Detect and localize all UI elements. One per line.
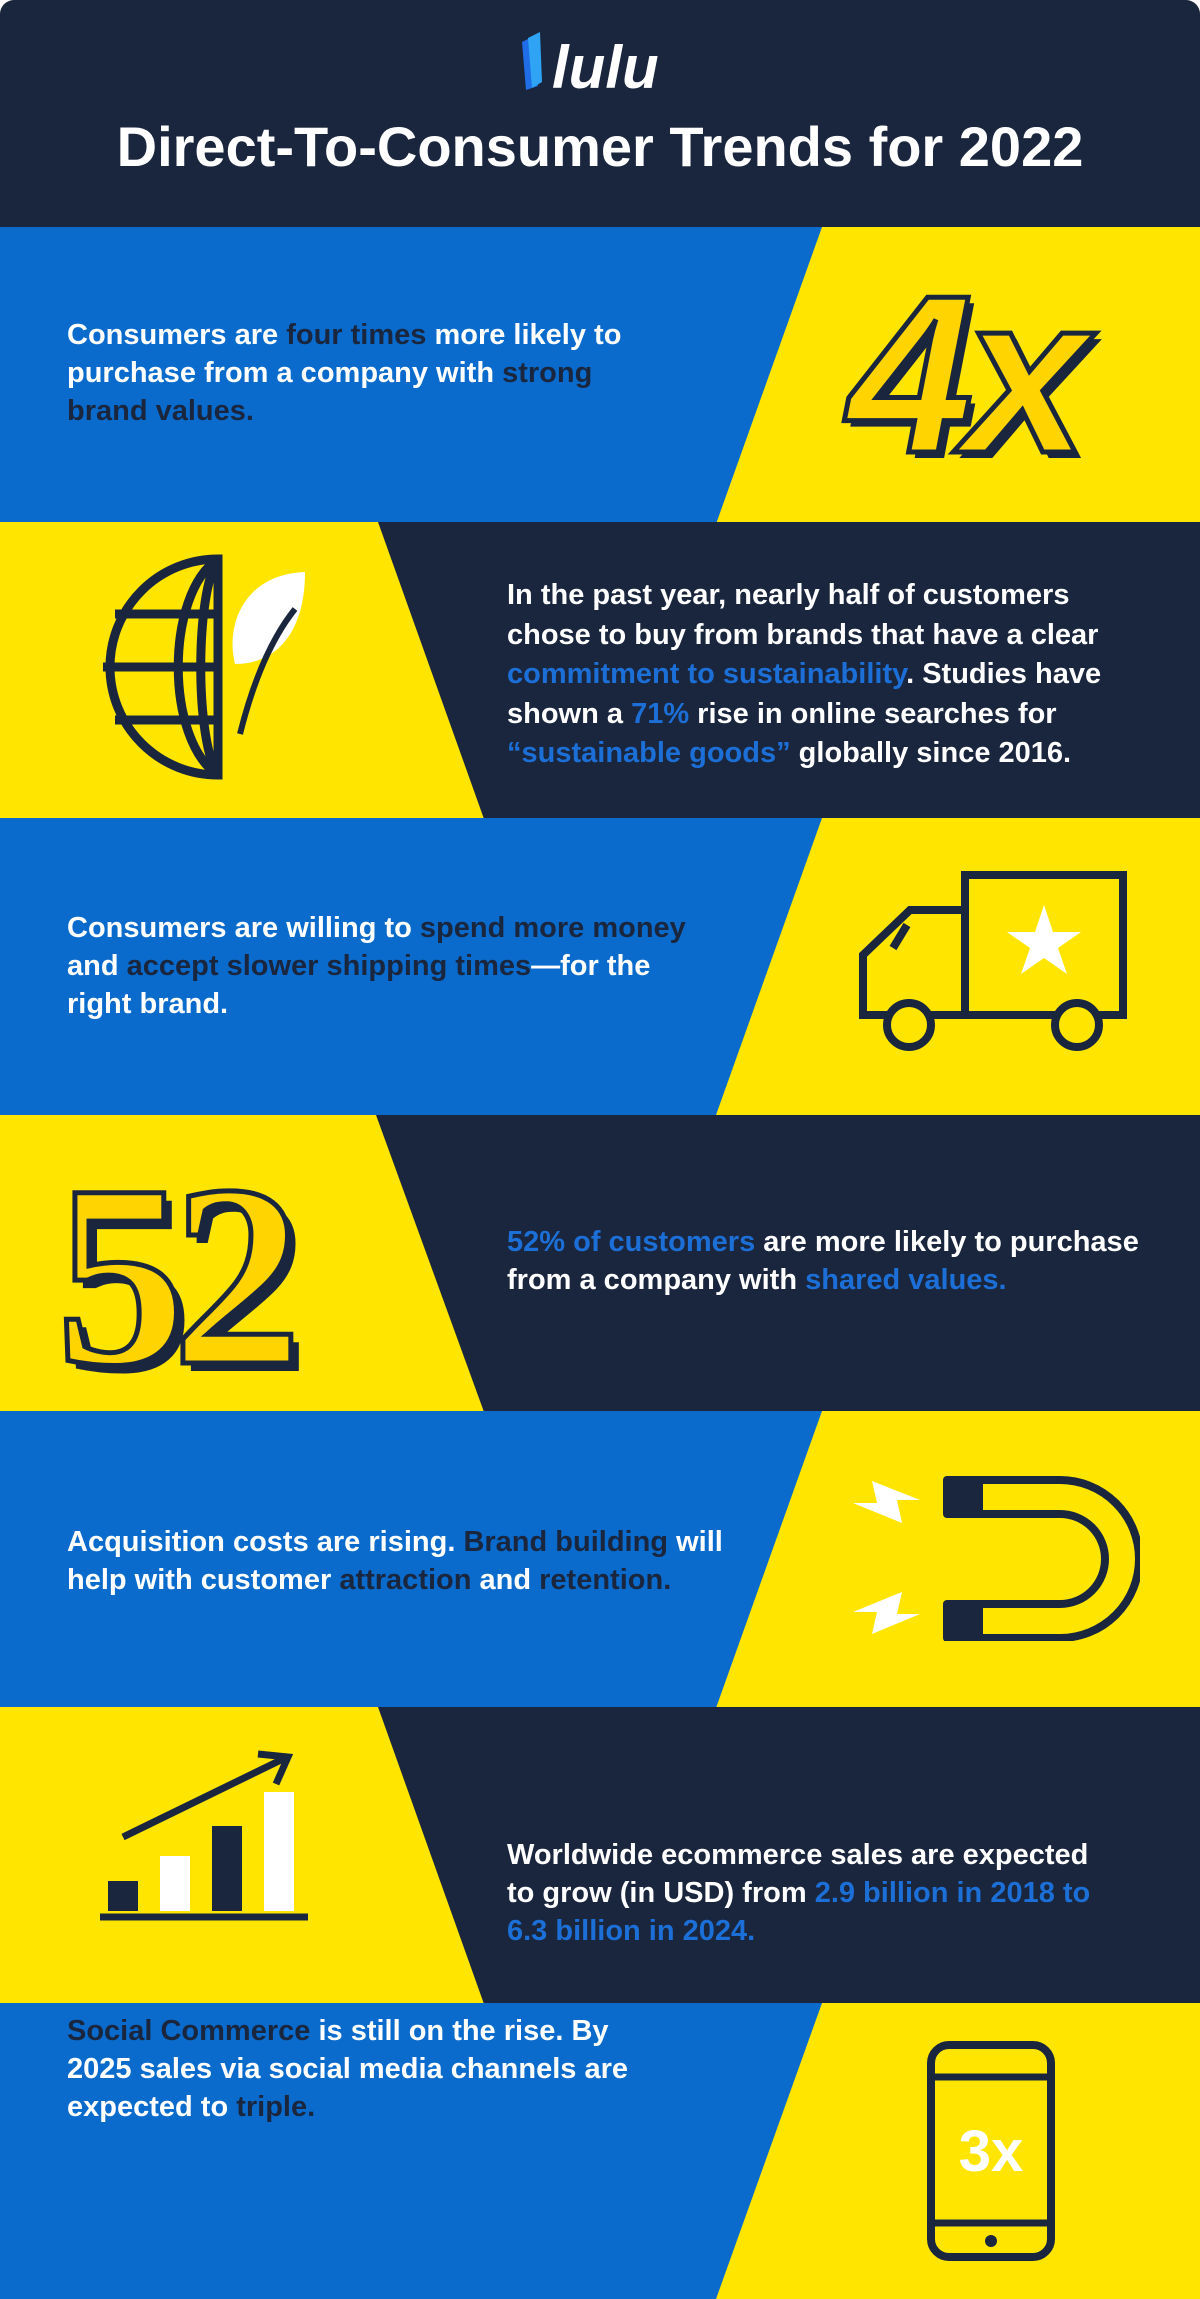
text: spending: right brand.	[67, 988, 228, 1020]
row 5	[0, 1411, 1200, 1707]
title: Direct-To-Consumer Trends for 2022	[117, 115, 1083, 178]
icon: globe and leaf	[103, 554, 305, 780]
text: brand values: purchase from a company with strong	[67, 357, 592, 389]
text: sustainability: chose to buy from brands that have a clear	[507, 618, 1098, 650]
text: sustainability: commitment to sustainability. Studies have	[507, 658, 1101, 690]
icon: phone 3x	[927, 2041, 1055, 2261]
icon: truck	[859, 871, 1127, 1051]
text: shared values: 52% of customers are more likely to purchase	[507, 1226, 1139, 1258]
text: sustainability: “sustainable goods” globally since 2016.	[507, 737, 1071, 769]
text: ecommerce sales	[507, 1839, 1090, 1947]
row 6	[0, 1707, 1200, 2003]
text: social commerce: Social Commerce is still on the rise. By	[67, 2015, 609, 2047]
text: shared values: from a company with shared values.	[507, 1264, 1007, 1296]
text: shared values	[507, 1226, 1139, 1296]
text: social commerce: expected to triple.	[67, 2091, 315, 2123]
text: spending: and accept slower shipping times—for the	[67, 950, 650, 982]
text: spending: Consumers are willing to spend more money	[67, 912, 686, 944]
row 1	[0, 227, 1200, 522]
text: sustainability: In the past year, nearly half of customers	[507, 579, 1069, 611]
icon: phone 3x: 3x	[959, 2119, 1023, 2184]
text: acquisition	[67, 1526, 723, 1596]
icon: bar chart	[100, 1750, 308, 1920]
row 4	[0, 1115, 1200, 1411]
text: ecommerce sales: Worldwide ecommerce sales are expected	[507, 1839, 1088, 1871]
text: brand values: brand values.	[67, 395, 254, 427]
header	[0, 0, 1200, 227]
text: spending	[67, 912, 686, 1020]
icon: magnet	[853, 1476, 1140, 1641]
row 7	[0, 2003, 1200, 2299]
row 2	[0, 522, 1200, 818]
text: brand values	[67, 319, 621, 427]
text: ecommerce sales: 6.3 billion in 2024.	[507, 1915, 755, 1947]
text: sustainability	[507, 579, 1101, 769]
text: acquisition: Acquisition costs are rising. Brand building will	[67, 1526, 723, 1558]
text: acquisition: help with customer attraction and retention.	[67, 1564, 671, 1596]
text: social commerce	[67, 2015, 628, 2123]
text: brand values: Consumers are four times more likely to	[67, 319, 621, 351]
text: social commerce: 2025 sales via social media channels are	[67, 2053, 628, 2085]
row 3	[0, 818, 1200, 1115]
text: ecommerce sales: to grow (in USD) from 2.9 billion in 2018 to	[507, 1877, 1090, 1909]
text: sustainability: shown a 71% rise in online searches for	[507, 698, 1057, 730]
